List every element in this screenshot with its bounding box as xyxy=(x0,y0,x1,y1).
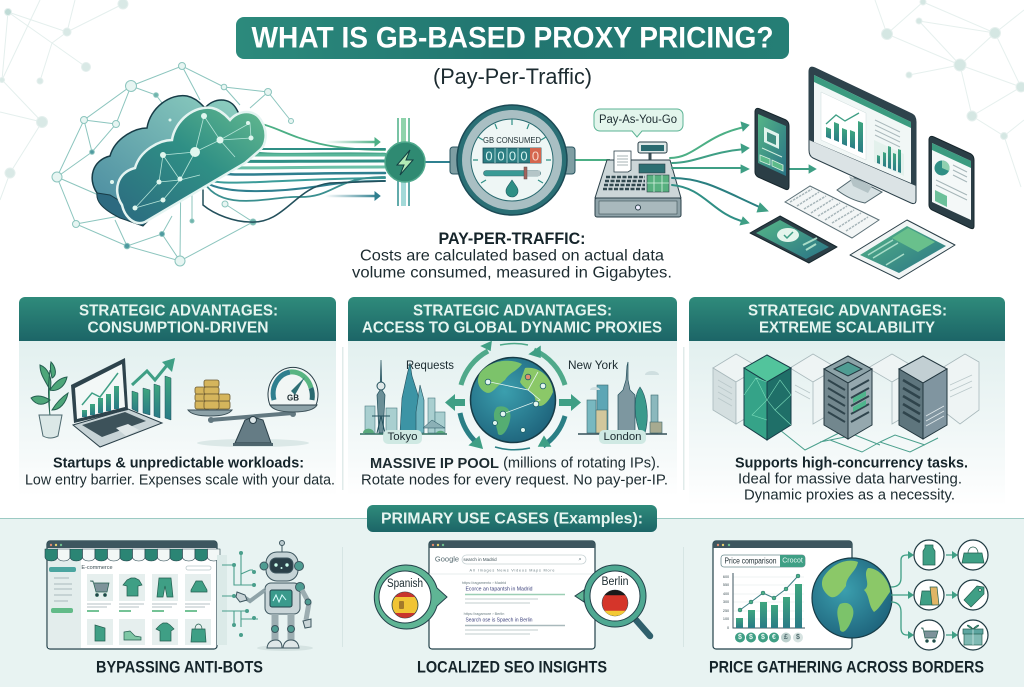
panel 3 text: Dynamic proxies as a necessity. xyxy=(744,486,955,504)
panel 2 header: STRATEGIC ADVANTAGES: xyxy=(413,302,612,320)
google wordmark: Google xyxy=(435,554,459,564)
currency coins: $ xyxy=(796,634,800,641)
meter label: GB CONSUMED xyxy=(483,135,541,145)
meter digits xyxy=(483,148,541,164)
background network: top right xyxy=(875,0,1024,187)
icon: balance scale with coins and gauge: GB xyxy=(287,394,299,402)
label: london: London xyxy=(604,431,642,443)
icon: localized search window: https://ragamento › Madrid xyxy=(462,581,506,585)
callout: spanish magnifier: Spanish xyxy=(387,578,423,590)
icon: potted plant xyxy=(31,362,68,438)
currency coins: $ xyxy=(761,634,765,641)
panel 2 header xyxy=(348,297,677,341)
icon: desktop monitor xyxy=(809,67,916,204)
callout: pay-as-you-go: Pay-As-You-Go xyxy=(599,114,677,126)
icon: robot xyxy=(236,540,313,651)
icon: server rack right xyxy=(899,356,947,439)
panel: global dynamic proxies xyxy=(342,297,677,496)
icon: price comparison window xyxy=(713,541,852,649)
icon: laptop with chart xyxy=(71,358,162,447)
chart: price bar chart: 0 xyxy=(727,626,729,630)
label: bypassing anti-bots: BYPASSING ANTI-BOTS xyxy=(96,658,263,676)
panel 3 text: Supports high-concurrency tasks. xyxy=(735,454,968,472)
meter digits: 0 xyxy=(509,148,516,164)
icon: energy hub xyxy=(385,117,452,207)
panel 3 header: EXTREME SCALABILITY xyxy=(759,320,936,336)
price comparison label: Price comparison xyxy=(724,556,776,566)
arrow: right to london xyxy=(559,394,581,411)
panel 2 text: MASSIVE IP POOL (millions of rotating IPs). xyxy=(370,454,660,472)
panel 1 header: STRATEGIC ADVANTAGES: xyxy=(79,302,278,320)
panel 1 header: CONSUMPTION-DRIVEN xyxy=(88,320,268,336)
icon: routes to shopping items xyxy=(891,551,958,639)
icon: circuit traces xyxy=(222,551,258,637)
chart: price bar chart: 550 xyxy=(723,583,729,587)
currency coins: € xyxy=(772,634,776,641)
icon: ghost server racks xyxy=(713,354,979,424)
callout: spanish magnifier xyxy=(374,565,447,629)
icons: shopping item circles xyxy=(914,540,988,650)
icon: localized search window: All Images News Videos Maps More xyxy=(470,568,554,572)
panel 2 text xyxy=(361,454,668,488)
callout: berlin magnifier xyxy=(575,565,650,636)
label: new york: New York xyxy=(568,360,618,372)
meter digits: 0 xyxy=(520,148,528,164)
icon: e-commerce window: E-commerce xyxy=(81,565,113,571)
icon: isometric network cloud xyxy=(92,96,266,226)
section heading pill: PRIMARY USE CASES (Examples): xyxy=(381,510,643,528)
panel: consumption-driven xyxy=(19,297,336,496)
callout: berlin magnifier: Berlin xyxy=(602,576,628,588)
meter digits: 0 xyxy=(485,148,493,164)
meter digits: 0 xyxy=(532,148,539,164)
icon: localized search window: ⌕ xyxy=(579,556,582,562)
panel: extreme scalability xyxy=(683,297,1005,506)
icon: localized search window: search in Madrid xyxy=(463,557,497,562)
icon: price comparison window: Crocot xyxy=(782,558,803,564)
icon: localized search window: Search ose is Spaech in Berlin xyxy=(466,618,532,624)
currency coins xyxy=(735,632,803,642)
icon: growth bars xyxy=(132,358,175,420)
icon: new york and london skyline xyxy=(578,362,667,434)
icon: localized search window: https://ragamore › Berlin xyxy=(464,612,504,616)
panel 1 text: Low entry barrier. Expenses scale with your data. xyxy=(25,472,335,488)
icon: network connections under servers xyxy=(780,430,938,452)
label: london xyxy=(599,430,646,444)
icon: localized search window xyxy=(429,541,595,649)
icon: rotating arrows around globe xyxy=(460,342,565,450)
icon: tokyo skyline xyxy=(360,360,447,434)
panel 1 text xyxy=(25,454,335,488)
icon: world globe xyxy=(812,558,892,638)
icon: tablet lying flat xyxy=(850,220,955,279)
chart: price bar chart: 300 xyxy=(723,600,729,604)
panel 3 header: STRATEGIC ADVANTAGES: xyxy=(748,302,947,320)
panel 1 text: Startups & unpredictable workloads: xyxy=(53,454,304,472)
panel 3 text: Ideal for massive data harvesting. xyxy=(738,470,962,488)
icon: smartphone upright xyxy=(755,108,789,190)
section heading pill xyxy=(367,505,657,532)
icon: server rack center xyxy=(824,356,872,439)
label: requests: Requests xyxy=(406,360,454,372)
title banner: WHAT IS GB-BASED PROXY PRICING? xyxy=(252,22,774,54)
chart: price bar chart: 100 xyxy=(723,617,729,621)
background network: top left xyxy=(0,0,128,200)
icon: tablet upright xyxy=(929,136,974,229)
icon: globe with nodes xyxy=(470,358,556,442)
icon: keyboard xyxy=(785,186,879,238)
icon: GB consumed meter xyxy=(450,105,610,215)
label: tokyo xyxy=(383,430,422,444)
currency coins: £ xyxy=(784,634,788,641)
icon: balance scale with coins and gauge xyxy=(188,367,318,447)
chart: price bar chart: 600 xyxy=(723,575,729,579)
currency coins: $ xyxy=(738,634,742,641)
text: pay-per-traffic definition: volume consumed, measured in Gigabytes. xyxy=(352,264,672,282)
network around cloud xyxy=(52,62,294,266)
subtitle: (Pay-Per-Traffic) xyxy=(433,64,592,89)
product icons xyxy=(90,578,207,642)
panel 2 header: ACCESS TO GLOBAL DYNAMIC PROXIES xyxy=(362,320,662,336)
label: localized seo insights: LOCALIZED SEO INSIGHTS xyxy=(417,658,607,676)
panel 3 text xyxy=(735,454,968,504)
product tiles xyxy=(87,574,211,645)
icon: localized search window: Ecorce an tapantsh in Madrid xyxy=(466,586,532,592)
label: tokyo: Tokyo xyxy=(388,431,418,443)
icon: green crystal server xyxy=(744,355,791,440)
icon: cash register xyxy=(595,142,681,217)
label: price gathering across borders: PRICE GATHERING ACROSS BORDERS xyxy=(709,658,984,676)
text: pay-per-traffic definition: Costs are calculated based on actual data xyxy=(360,248,664,264)
icon: smartphone lying flat xyxy=(750,216,837,263)
chart: price bar chart xyxy=(723,573,805,630)
text: pay-per-traffic definition xyxy=(352,229,672,282)
arrows from register to devices xyxy=(670,122,816,225)
panel 1 header xyxy=(19,297,336,341)
chart: price bar chart: 400 xyxy=(723,592,729,596)
icon: e-commerce window xyxy=(45,541,227,649)
text: pay-per-traffic definition: PAY-PER-TRAFFIC: xyxy=(438,229,586,248)
callout: pay-as-you-go xyxy=(594,109,683,137)
chart: price bar chart: 250 xyxy=(723,609,729,613)
panel 2 text: Rotate nodes for every request. No pay-per-IP. xyxy=(361,472,668,488)
currency coins: $ xyxy=(749,634,753,641)
arrow: left to tokyo xyxy=(445,394,465,411)
shop awning xyxy=(45,549,220,561)
data flow lines from cloud to hub xyxy=(202,122,385,222)
panel 3 header xyxy=(689,297,1005,341)
meter digits: 0 xyxy=(497,148,505,164)
panel: primary use cases xyxy=(0,505,1024,687)
